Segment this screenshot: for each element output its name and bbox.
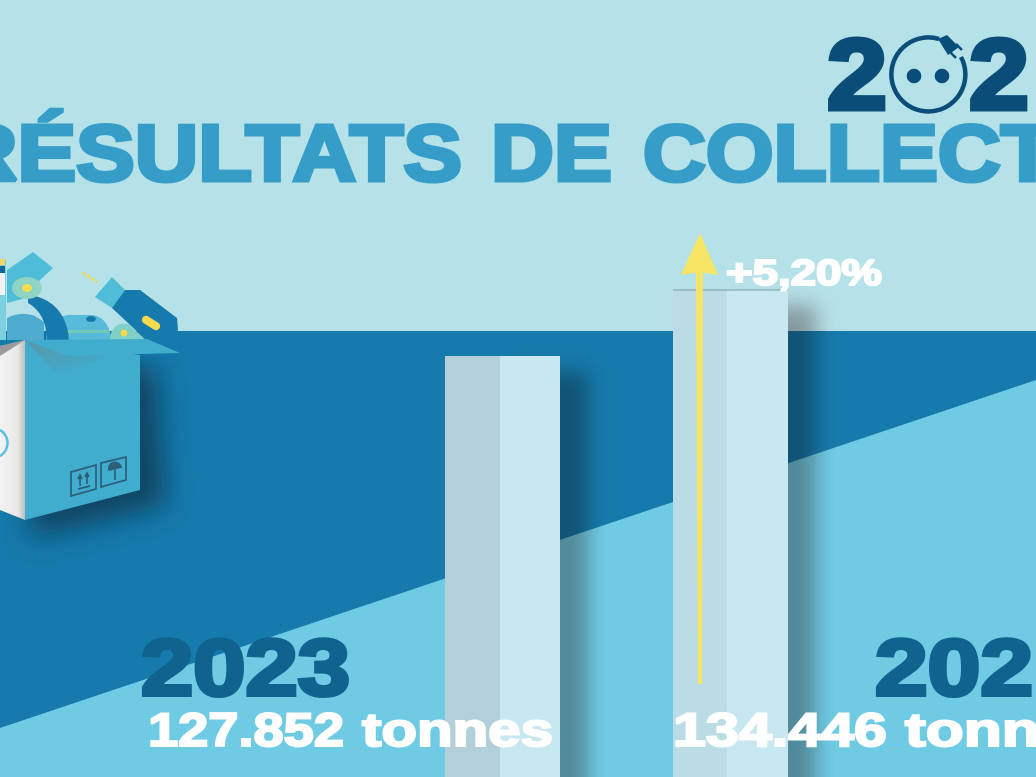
tonnage 2023: tonnes bbox=[362, 703, 553, 756]
icon: plug socket bbox=[891, 35, 965, 111]
box flap bbox=[25, 339, 180, 356]
bar 2024 bbox=[673, 290, 816, 777]
box left face bbox=[0, 340, 25, 520]
box right face bbox=[25, 340, 140, 520]
recycling mark bbox=[0, 430, 8, 456]
tools spilling out of the box bbox=[0, 252, 178, 346]
growth percentage: +5,20% bbox=[726, 252, 882, 293]
bar shadow bbox=[530, 372, 588, 777]
background: dark blue band bbox=[0, 331, 1036, 777]
year logo 2024 with socket: 2 bbox=[969, 19, 1029, 131]
icon: this way up bbox=[71, 465, 96, 496]
box illustration bbox=[0, 252, 180, 538]
year logo 2024 with socket bbox=[827, 19, 1036, 131]
tonnage 2024 bbox=[673, 703, 1036, 756]
tonnage 2024: 134.446 bbox=[673, 703, 887, 756]
year logo 2024 with socket: 2 bbox=[827, 19, 887, 131]
year 2023: 2023 bbox=[141, 623, 350, 712]
growth arrow bbox=[681, 233, 718, 684]
main title bbox=[0, 108, 1036, 198]
main title: DE bbox=[491, 108, 612, 198]
icon: keep dry umbrella bbox=[101, 457, 126, 487]
tonnage 2023: 127.852 bbox=[148, 703, 344, 756]
year 2024: 202 bbox=[875, 623, 1033, 712]
box shadow bbox=[30, 352, 166, 538]
bar shadow bbox=[758, 306, 816, 777]
background: light blue diagonal bbox=[0, 380, 1036, 777]
bar 2023 bbox=[445, 356, 588, 777]
tonnage 2023 bbox=[148, 703, 553, 756]
